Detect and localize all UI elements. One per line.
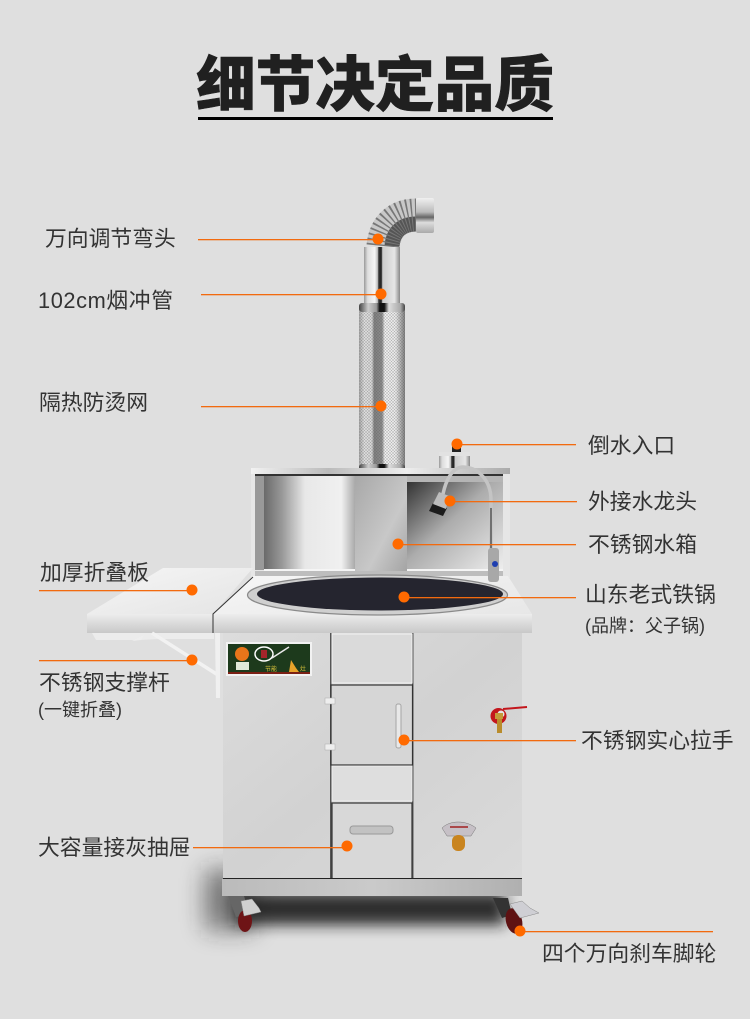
chimney elbow [383, 198, 434, 246]
callout: water tank [392, 532, 697, 557]
callout: iron wok: 山东老式铁锅 [585, 582, 716, 607]
heat-proof mesh [359, 303, 405, 471]
callout: elbow: 万向调节弯头 [45, 226, 176, 251]
callout: elbow [45, 226, 384, 251]
left caster [228, 896, 261, 932]
callout: ash drawer: 大容量接灰抽屉 [38, 835, 191, 860]
iron wok [248, 575, 508, 615]
callout: water inlet: 倒水入口 [588, 433, 675, 458]
callout: solid handle: 不锈钢实心拉手 [581, 728, 734, 753]
ash drawer [332, 803, 412, 879]
callout: solid handle [398, 728, 734, 753]
small door [331, 685, 412, 765]
drain tap [490, 707, 527, 733]
faucet [429, 467, 499, 582]
water inlet cap [439, 444, 470, 470]
callout: water tank: 不锈钢水箱 [588, 532, 697, 557]
blank panel [332, 766, 412, 801]
callout: support bar: (一键折叠) [38, 700, 122, 720]
callout: casters: 四个万向刹车脚轮 [542, 941, 716, 966]
logo plate: 灶 [300, 665, 306, 673]
folding board [87, 568, 253, 640]
callout: faucet [444, 489, 697, 514]
callout: heat mesh: 隔热防烫网 [39, 390, 148, 415]
cooktop [213, 576, 532, 633]
callout: faucet: 外接水龙头 [588, 489, 697, 514]
base plate [222, 879, 522, 896]
callout: casters [514, 926, 716, 966]
callout: chimney pipe: 102cm烟冲管 [38, 288, 173, 313]
product: stove [87, 198, 539, 936]
callout: iron wok: (品牌：父子锅) [585, 616, 705, 636]
callout: ash drawer [38, 835, 352, 860]
title: 细节决定品质 [196, 52, 554, 119]
callout: chimney pipe [38, 288, 386, 313]
door handle [396, 704, 401, 748]
callout: heat mesh [39, 390, 386, 415]
drawer handle [350, 826, 393, 834]
callout: folding board: 加厚折叠板 [40, 560, 149, 585]
callout: water inlet [452, 433, 675, 458]
right caster [493, 898, 539, 936]
chimney pipe [364, 247, 400, 304]
callout: support bar [38, 654, 198, 720]
floor shadow [205, 870, 505, 930]
top panel [332, 634, 412, 683]
hinges [325, 698, 335, 750]
callout: folding board [39, 560, 198, 596]
water tank [251, 468, 510, 578]
logo plate: 节能 [265, 665, 277, 673]
callout: support bar: 不锈钢支撑杆 [39, 670, 170, 695]
callout: iron wok [398, 582, 716, 636]
support bracket [132, 633, 220, 698]
logo plate [226, 642, 312, 676]
cabinet [223, 633, 522, 880]
gauge and light [442, 822, 476, 851]
